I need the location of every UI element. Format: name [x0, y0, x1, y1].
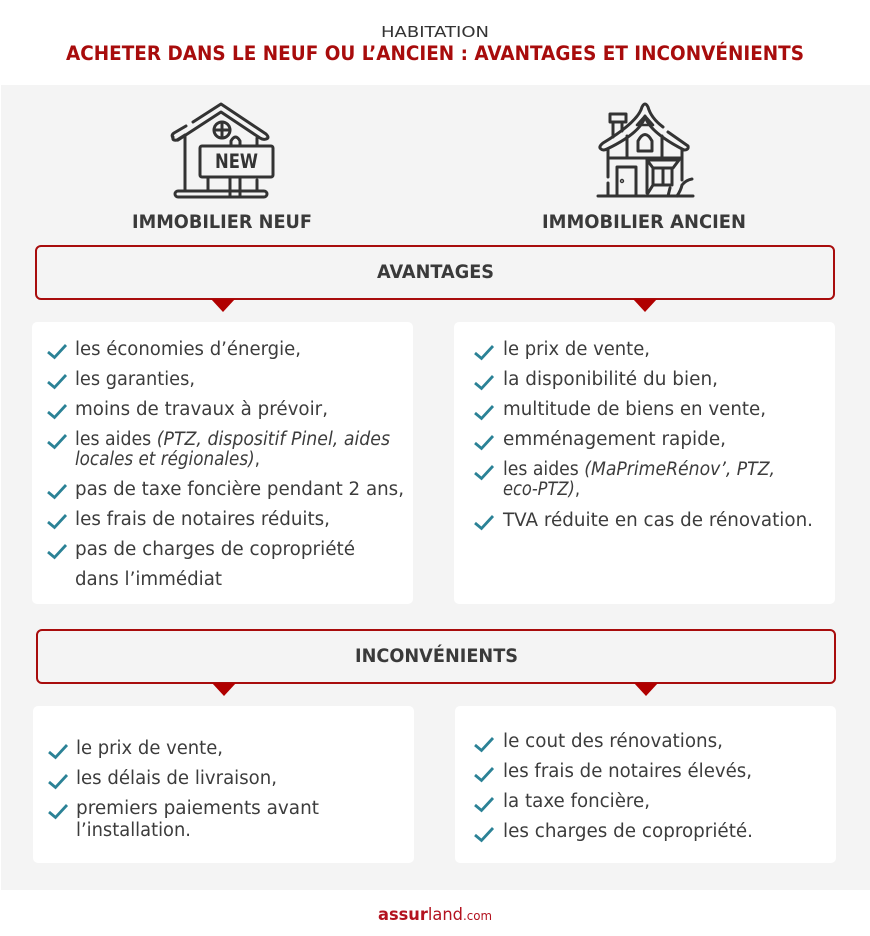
panel: avantages ancien: les aides (MaPrimeRénov’, PTZ, [503, 459, 775, 480]
panel: avantages ancien: le prix de vente, [503, 339, 650, 360]
panel: avantages neuf: les aides (PTZ, dispositif Pinel, aides [75, 429, 390, 450]
panel: avantages neuf [32, 322, 413, 604]
title [66, 23, 804, 65]
panel: inconvénients ancien: les frais de notaires élevés, [503, 761, 752, 782]
panel: inconvénients neuf: premiers paiements avant [76, 798, 319, 819]
banner: inconvénients: INCONVÉNIENTS [355, 645, 518, 667]
heading: immobilier ancien: IMMOBILIER ANCIEN [542, 212, 746, 233]
panel: inconvénients neuf: les délais de livraison, [76, 768, 277, 789]
banner: avantages [36, 246, 834, 312]
banner: avantages: AVANTAGES [377, 262, 494, 283]
icon: new house: NEW [215, 150, 258, 173]
panel: inconvénients ancien [455, 706, 836, 863]
panel: avantages ancien: la disponibilité du bien, [503, 369, 718, 390]
panel: avantages ancien: emménagement rapide, [503, 429, 726, 450]
panel: avantages neuf: moins de travaux à prévoir, [75, 399, 328, 420]
title: ACHETER DANS LE NEUF OU L’ANCIEN : AVANTAGES ET INCONVÉNIENTS [66, 42, 804, 65]
panel: avantages neuf: pas de charges de copropriété [75, 539, 355, 560]
banner: inconvénients [37, 630, 835, 696]
panel: inconvénients ancien: la taxe foncière, [503, 791, 650, 812]
heading: immobilier neuf: IMMOBILIER NEUF [132, 212, 312, 233]
panel: inconvénients neuf: le prix de vente, [76, 738, 223, 759]
panel: avantages neuf: pas de taxe foncière pendant 2 ans, [75, 479, 404, 500]
panel: avantages ancien: eco-PTZ), [503, 479, 580, 500]
panel: avantages neuf: dans l’immédiat [75, 569, 222, 590]
panel: inconvénients ancien: les charges de copropriété. [503, 821, 753, 842]
panel: inconvénients ancien: le cout des rénovations, [503, 731, 723, 752]
panel: avantages neuf: locales et régionales), [75, 449, 260, 470]
icon: old house [598, 104, 693, 196]
panel: avantages neuf: les frais de notaires réduits, [75, 509, 330, 530]
panel: avantages ancien: multitude de biens en vente, [503, 399, 766, 420]
panel: avantages ancien [454, 322, 835, 604]
panel: inconvénients neuf: l’installation. [76, 820, 191, 841]
logo: assurland.com: assurland.com [378, 905, 492, 924]
icon: new house [172, 104, 273, 197]
panel: avantages neuf: les garanties, [75, 369, 195, 390]
panel: avantages neuf: les économies d’énergie, [75, 339, 301, 360]
panel: avantages ancien: TVA réduite en cas de rénovation. [502, 510, 813, 531]
title: HABITATION [381, 23, 489, 41]
panel: inconvénients neuf [33, 706, 414, 863]
